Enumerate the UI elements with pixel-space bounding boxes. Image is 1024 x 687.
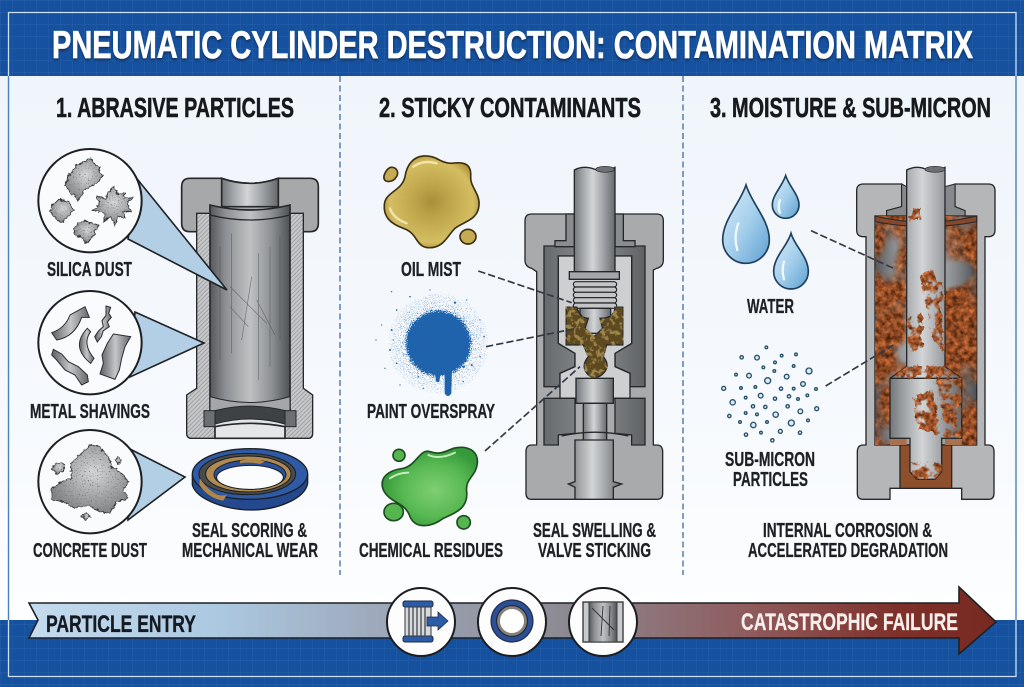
caption: seal swelling bbox=[533, 520, 656, 562]
labels: abrasive types bbox=[30, 259, 150, 562]
callout wedge: silica bbox=[128, 180, 227, 290]
labels: moisture types: PARTICLES bbox=[733, 469, 808, 491]
labels: sticky types bbox=[359, 259, 503, 562]
icon: concrete dust circle bbox=[38, 430, 142, 533]
labels: sticky types: CHEMICAL RESIDUES bbox=[359, 540, 503, 562]
icon: silica dust circle bbox=[38, 149, 142, 252]
labels: sticky types: OIL MIST bbox=[401, 259, 461, 281]
panel: sticky contaminants bbox=[359, 92, 663, 562]
icon: water drops bbox=[723, 176, 808, 289]
leader lines: contaminants bbox=[478, 271, 580, 451]
icon: scored bore stage bbox=[569, 588, 637, 656]
caption: seal swelling: SEAL SWELLING & bbox=[533, 520, 656, 542]
icon: metal shavings circle bbox=[38, 291, 142, 394]
panel: moisture and sub-micron bbox=[710, 92, 995, 562]
caption: seal scoring bbox=[182, 520, 318, 562]
icon: chemical residue puddle bbox=[382, 447, 477, 529]
labels: sticky types: PAINT OVERSPRAY bbox=[367, 401, 495, 423]
icon: valve with sticky seal bbox=[525, 166, 663, 499]
caption: seal scoring: SEAL SCORING & bbox=[192, 520, 307, 542]
arrow start label: PARTICLE ENTRY bbox=[46, 611, 196, 638]
labels: abrasive types: SILICA DUST bbox=[47, 259, 132, 281]
icon: sub-micron particles bbox=[722, 346, 819, 442]
caption: corrosion bbox=[748, 520, 948, 562]
background panel bbox=[0, 76, 1024, 621]
icon: paint overspray bbox=[375, 289, 488, 396]
callout wedge: shavings bbox=[130, 312, 204, 377]
icon: corroded cylinder bbox=[857, 166, 995, 499]
heading: sticky contaminants: 2. STICKY CONTAMINANTS bbox=[379, 92, 641, 123]
caption: corrosion: INTERNAL CORROSION & bbox=[763, 520, 932, 542]
icon: filter stage bbox=[387, 588, 455, 656]
callout wedge: concrete bbox=[128, 448, 185, 520]
icon: worn seal bbox=[192, 449, 308, 510]
icon: seal stage bbox=[478, 588, 546, 656]
footer band bbox=[0, 620, 1024, 687]
caption: seal scoring: MECHANICAL WEAR bbox=[182, 540, 318, 562]
cylinder cross-section with scored bore bbox=[182, 178, 318, 438]
icon: oil mist puddle bbox=[384, 156, 479, 248]
heading: abrasive particles: 1. ABRASIVE PARTICLES bbox=[56, 92, 294, 123]
caption: seal swelling: VALVE STICKING bbox=[538, 540, 651, 562]
labels: moisture types bbox=[725, 296, 815, 491]
labels: moisture types: SUB-MICRON bbox=[725, 449, 815, 471]
panel: abrasive particles bbox=[30, 92, 318, 562]
labels: abrasive types: METAL SHAVINGS bbox=[30, 401, 150, 423]
labels: moisture types: WATER bbox=[747, 296, 794, 318]
progression arrow bbox=[29, 587, 996, 654]
header band bbox=[0, 0, 1024, 76]
leader lines: moisture bbox=[811, 231, 895, 386]
labels: abrasive types: CONCRETE DUST bbox=[33, 540, 147, 562]
